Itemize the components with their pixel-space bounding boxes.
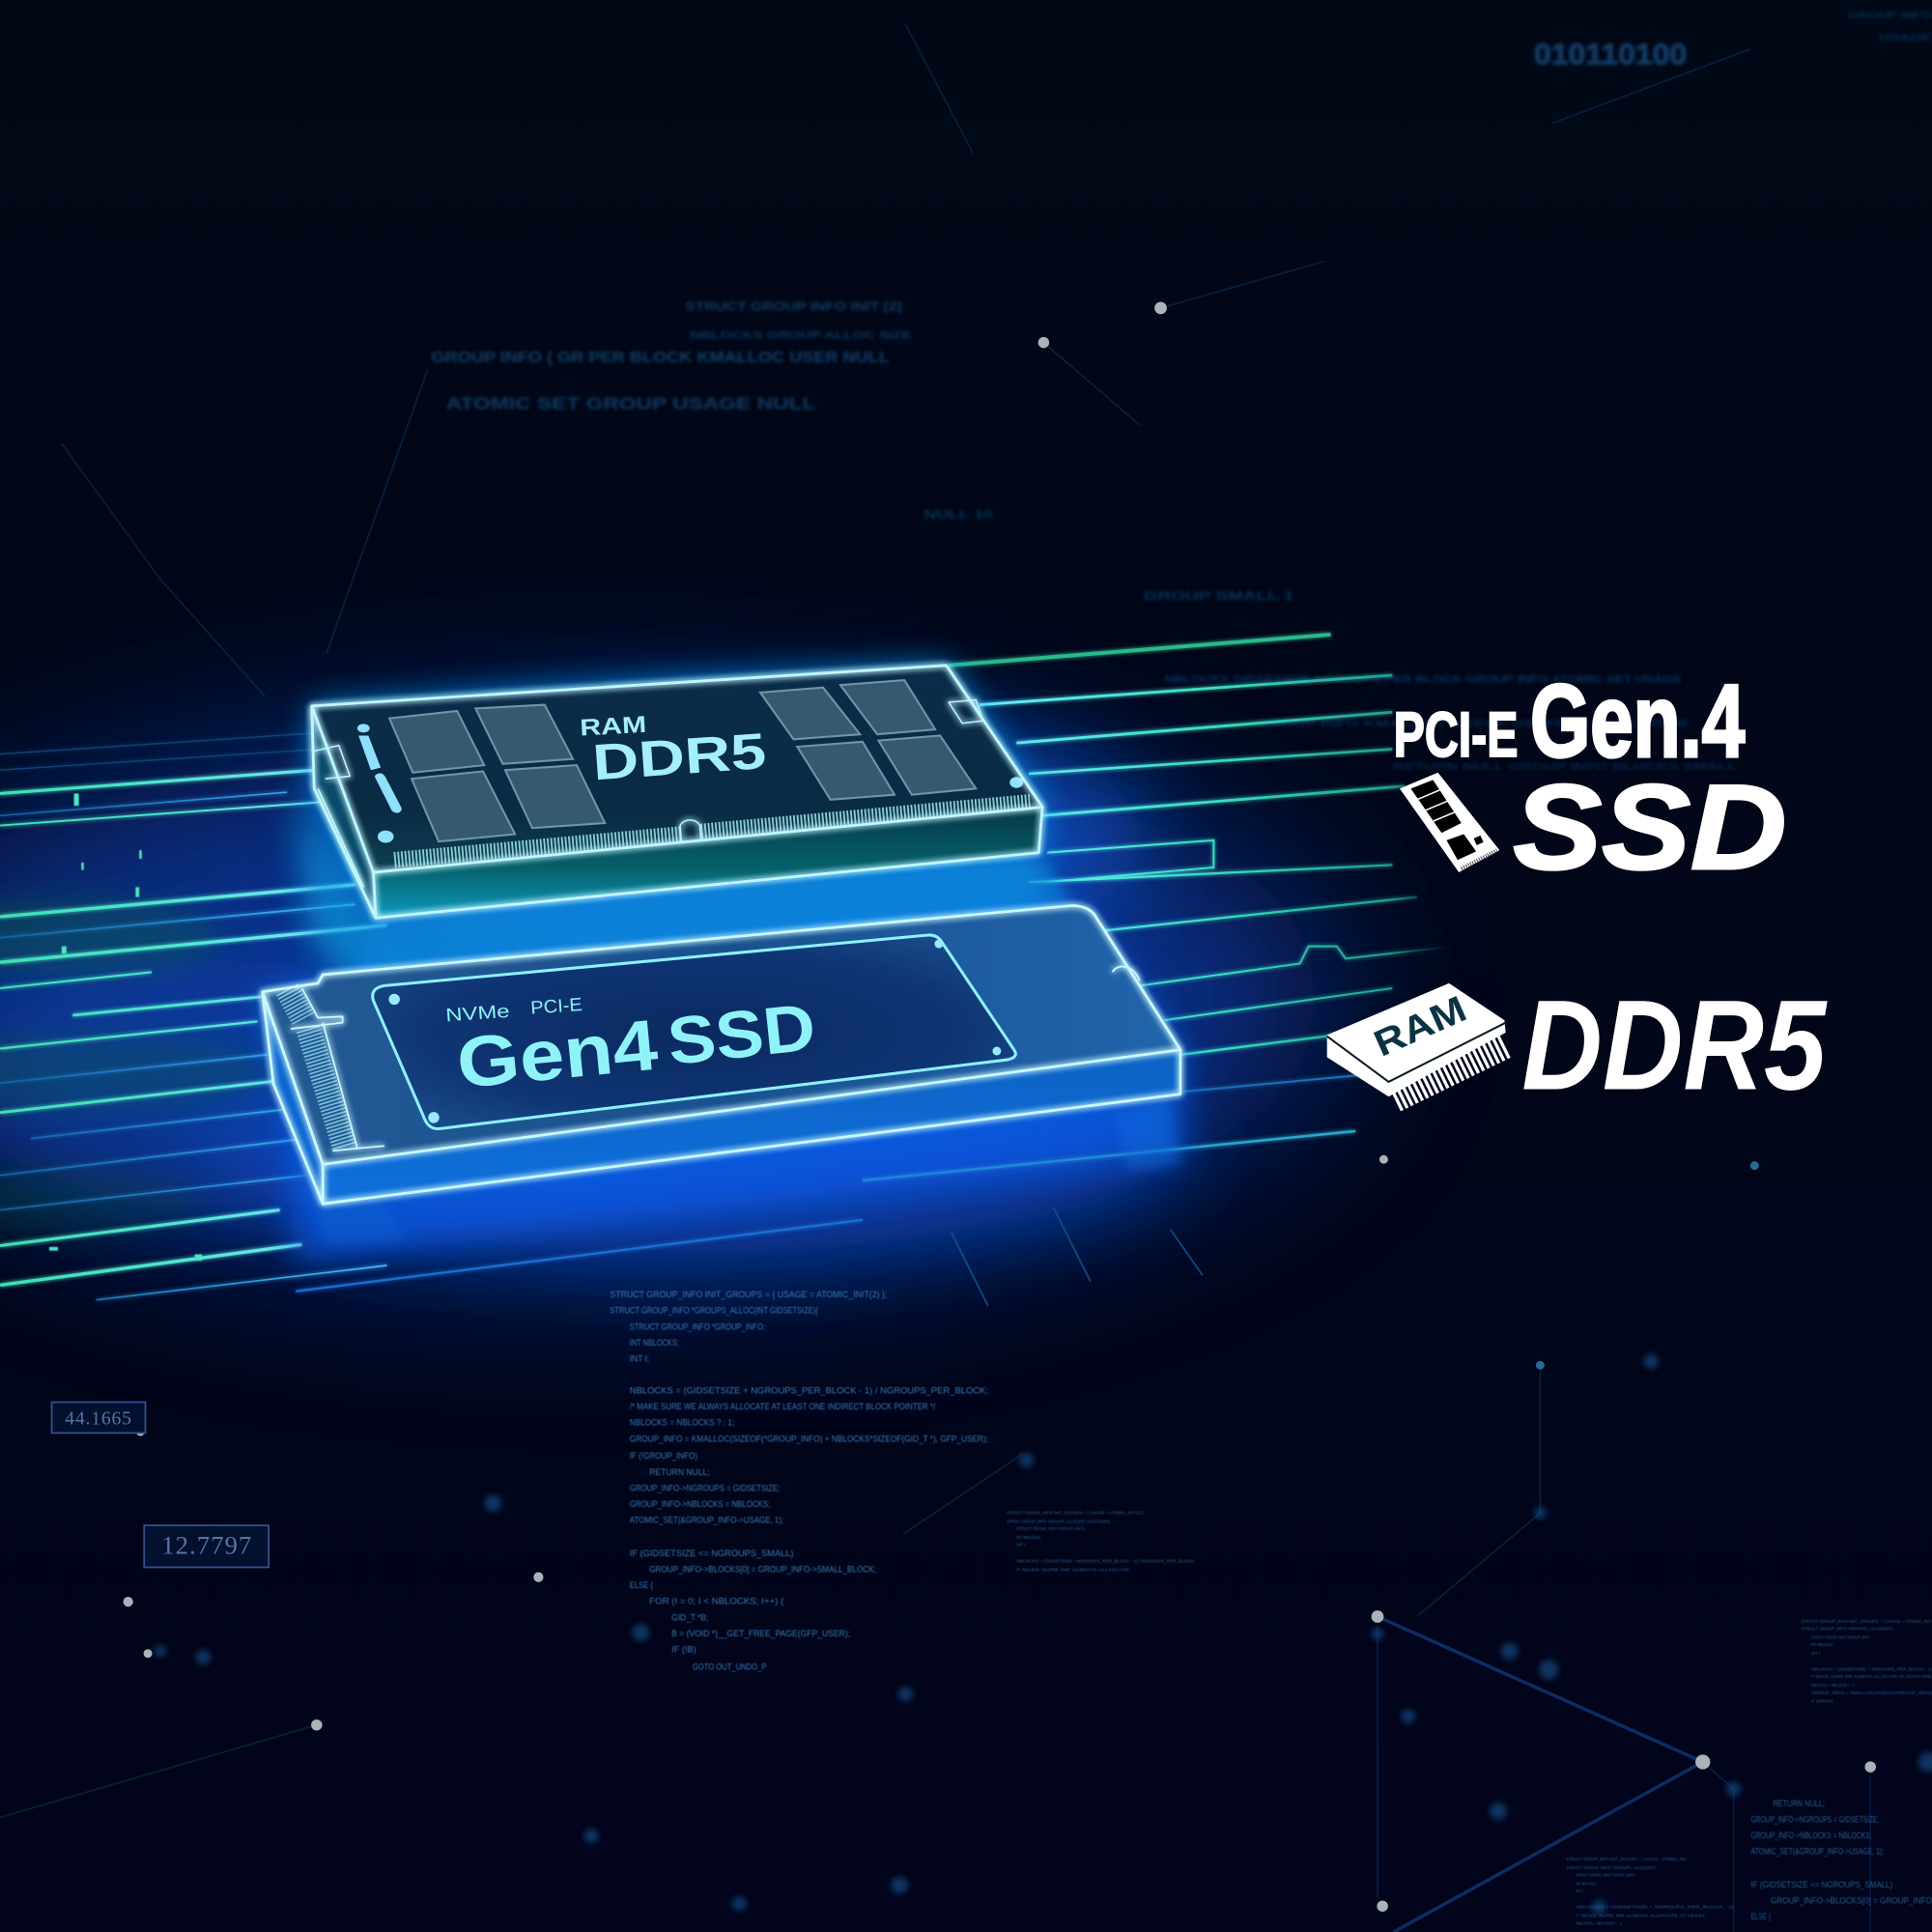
small code block middle: STRUCT GROUP_INFO INIT_GROUPS = { USAGE = ATOMIC_INIT(2) };	[1007, 1511, 1145, 1516]
code block center	[610, 1290, 988, 1671]
code block center: NBLOCKS = (GIDSETSIZE + NGROUPS_PER_BLOCK - 1) / NGROUPS_PER_BLOCK;	[630, 1386, 988, 1396]
small code block middle: /* MAKE SURE WE ALWAYS ALLOCATE	[1016, 1567, 1130, 1572]
ram labels: DDR5	[591, 724, 768, 791]
small code block top right: STRUCT GROUP_INFO INIT_GROUPS = { USAGE = ATOMIC_INIT	[1802, 1619, 1932, 1624]
ssd module	[263, 906, 1180, 1204]
small code block bottom center: /* MAKE SURE WE ALWAYS ALLOCATE AT LEAST	[1576, 1914, 1706, 1918]
ssd label panel	[373, 935, 1015, 1129]
code block center: GOTO OUT_UNDO_P	[693, 1662, 766, 1671]
code block bottom right	[1750, 1799, 1932, 1921]
small code block middle: INT I;	[1016, 1543, 1026, 1548]
small code block bottom center	[1566, 1857, 1734, 1925]
small code block middle: STRUCT GROUP_INFO *GROUPS_ALLOC(INT GIDSETSIZE){	[1007, 1520, 1111, 1524]
ssd front face	[323, 1050, 1180, 1204]
ssd labels: PCI-E	[530, 995, 583, 1019]
code block bottom right: ATOMIC_SET(&GROUP_INFO->USAGE, 1);	[1750, 1847, 1884, 1857]
faint background text, top: 010110100	[1534, 38, 1687, 71]
small code block top right: GROUP_INFO = KMALLOC(SIZEOF(*GROUP_INFO)	[1811, 1690, 1932, 1695]
faint background text, top: USAGE	[1879, 33, 1932, 43]
code block center: GROUP_INFO->BLOCKS[0] = GROUP_INFO->SMALL_BLOCK;	[649, 1565, 876, 1575]
faint background text, top: NBLOCKS GROUP ALLOC SIZE	[690, 330, 912, 342]
code block center: RETURN NULL;	[649, 1467, 710, 1477]
heading: PCI-E Gen.4	[1394, 663, 1745, 779]
small code block top right	[1802, 1619, 1932, 1704]
code block center: ATOMIC_SET(&GROUP_INFO->USAGE, 1);	[630, 1516, 783, 1525]
code block center: FOR (I = 0; I < NBLOCKS; I++) {	[649, 1597, 783, 1606]
ssd screw holes	[388, 940, 1001, 1123]
faint background text, top: NULL 10	[924, 507, 993, 522]
code block center: IF (GIDSETSIZE <= NGROUPS_SMALL)	[630, 1548, 793, 1558]
code block bottom right: GROUP_INFO->NBLOCKS = NBLOCKS;	[1750, 1831, 1872, 1840]
ram connector pins	[394, 802, 1030, 860]
code block center: INT I;	[630, 1353, 649, 1363]
ram memory chips left	[389, 705, 605, 841]
ram memory chips right	[760, 680, 976, 800]
ram outline	[312, 666, 1042, 918]
small code block bottom center: INT I;	[1576, 1889, 1584, 1893]
ram labels	[580, 712, 768, 791]
icon: ram chip: RAM	[1368, 988, 1472, 1065]
code block bottom right: ELSE {	[1750, 1912, 1771, 1921]
heading: SSD: SSD	[1513, 760, 1786, 895]
small code block top right: NBLOCKS = (GIDSETSIZE + NGROUPS_PER_BLOCK - 1)	[1811, 1667, 1932, 1672]
circuit lines right	[296, 635, 1454, 1292]
code block center: STRUCT GROUP_INFO *GROUP_INFO;	[630, 1321, 765, 1331]
streaks under ssd	[952, 1208, 1203, 1306]
ram module	[312, 666, 1042, 918]
data box 12.7797: 12.7797	[161, 1530, 252, 1559]
small code block bottom center: INT NBLOCKS;	[1576, 1882, 1597, 1887]
code block center: /* MAKE SURE WE ALWAYS ALLOCATE AT LEAST ONE INDIRECT BLOCK POINTER */	[630, 1402, 935, 1411]
code block center: STRUCT GROUP_INFO *GROUPS_ALLOC(INT GIDSETSIZE){	[610, 1306, 818, 1316]
faint background text, top: RETURN NULL GROUP INFO BLOCKS SMALL	[1392, 761, 1737, 773]
code block center: GROUP_INFO = KMALLOC(SIZEOF(*GROUP_INFO) + NBLOCKS*SIZEOF(GID_T *), GFP_USER);	[630, 1434, 988, 1443]
ssd labels: SSD	[664, 989, 819, 1079]
heading: PCI-E Gen.4: Gen.4	[1530, 663, 1745, 779]
code block center: GROUP_INFO->NGROUPS = GIDSETSIZE;	[630, 1483, 780, 1492]
small code block bottom center: STRUCT GROUP_INFO *GROUP_INFO;	[1576, 1873, 1635, 1878]
ssd top face	[263, 906, 1180, 1164]
code block center: GROUP_INFO->NBLOCKS = NBLOCKS;	[630, 1499, 770, 1509]
heading: PCI-E Gen.4: PCI-E	[1394, 699, 1518, 771]
ambient blue glow	[0, 702, 1331, 1263]
data box 44.1665	[52, 1403, 146, 1433]
code block center: GID_T *B;	[671, 1612, 708, 1622]
small code block bottom center: NBLOCKS = NBLOCKS ? : 1;	[1576, 1920, 1623, 1925]
small code block middle	[1007, 1511, 1195, 1572]
circuit ticks left	[49, 793, 202, 1261]
code block bottom right: RETURN NULL;	[1773, 1799, 1825, 1808]
code block center: NBLOCKS = NBLOCKS ? : 1;	[630, 1418, 734, 1428]
ram side face	[312, 706, 376, 918]
ram labels: RAM	[580, 712, 647, 741]
faint background text, top: GROUP INFO KMALLOC SIZEOF GID FREE PAGE USER	[1257, 719, 1689, 730]
code block center: B = (VOID *)__GET_FREE_PAGE(GFP_USER);	[671, 1629, 850, 1638]
faint background text, top: STRUCT GROUP INFO INIT [2]	[685, 298, 902, 313]
small code block bottom center: NBLOCKS = (GIDSETSIZE + NGROUPS_PER_BLOCK - 1)	[1576, 1905, 1734, 1910]
small code block top right: STRUCT GROUP_INFO *GROUPS_ALLOC(INT)	[1802, 1627, 1893, 1632]
icon: ssd memory stick	[1400, 773, 1499, 872]
ssd labels: Gen4	[453, 1005, 661, 1103]
small code block middle: INT NBLOCKS;	[1016, 1535, 1041, 1540]
data box 44.1665: 44.1665	[65, 1407, 132, 1429]
code block bottom right: GROUP_INFO->NGROUPS = GIDSETSIZE;	[1750, 1814, 1879, 1824]
ram front face	[373, 807, 1042, 918]
small code block top right: STRUCT GROUP_INFO *GROUP_INFO;	[1811, 1634, 1870, 1639]
network graph bottom right	[1378, 1616, 1870, 1932]
code block center: ELSE {	[630, 1580, 653, 1590]
code block bottom right: IF (GIDSETSIZE <= NGROUPS_SMALL)	[1750, 1880, 1892, 1889]
light beams under ram and ssd	[263, 666, 1185, 1263]
code block center: IF (!B)	[671, 1644, 696, 1654]
small code block middle: STRUCT GROUP_INFO *GROUP_INFO;	[1016, 1526, 1086, 1531]
small code block top right: INT I;	[1811, 1651, 1821, 1656]
ssd outline	[263, 906, 1180, 1204]
small code block top right: NBLOCKS = NBLOCKS ? : 1;	[1811, 1683, 1856, 1688]
small code block middle: NBLOCKS = (GIDSETSIZE + NGROUPS_PER_BLOCK - 1) / NGROUPS_PER_BLOCK;	[1016, 1558, 1195, 1563]
small code block bottom center: STRUCT GROUP_INFO INIT_GROUPS = { USAGE = ATOMIC_INIT	[1566, 1857, 1688, 1861]
faint background text, top: ATOMIC SET GROUP USAGE NULL	[446, 393, 816, 412]
small code block top right: IF (!GROUP)	[1811, 1699, 1833, 1704]
circuit lines left	[0, 727, 407, 1300]
ssd labels: NVMe	[445, 1002, 510, 1026]
faint background text, top: GROUP INFO	[1848, 11, 1932, 21]
heading: DDR5: DDR5	[1521, 975, 1828, 1118]
icon: ram chip	[1327, 983, 1506, 1099]
faint background text, top: GROUP INFO ( GR PER BLOCK KMALLOC USER NULL	[431, 350, 890, 366]
ram top face	[312, 666, 1042, 872]
data box 12.7797	[144, 1525, 269, 1567]
faint background text, top: GROUP SMALL 1	[1144, 588, 1293, 603]
code block center: IF (!GROUP_INFO)	[630, 1451, 697, 1461]
network dots	[124, 301, 1932, 1915]
small code block bottom center: STRUCT GROUP_INFO *GROUPS_ALLOC(INT)	[1566, 1865, 1657, 1870]
faint background text, top: NBLOCKS GIDSETSIZE NGROUPS PER BLOCK GROUP INFO ATOMIC SET USAGE	[1164, 674, 1682, 686]
code block center: INT NBLOCKS;	[630, 1338, 679, 1348]
ssd labels	[445, 989, 819, 1103]
ram holes and slots	[357, 724, 1023, 842]
code block center: STRUCT GROUP_INFO INIT_GROUPS = { USAGE = ATOMIC_INIT(2) };	[610, 1290, 887, 1299]
small code block top right: INT NBLOCKS;	[1811, 1642, 1833, 1647]
ssd side face	[263, 992, 323, 1204]
faint background text, top	[431, 11, 1932, 773]
small code block top right: /* MAKE SURE WE ALWAYS ALLOCATE AT LEAST ONE	[1811, 1674, 1932, 1679]
ssd connector pins	[287, 989, 345, 1149]
